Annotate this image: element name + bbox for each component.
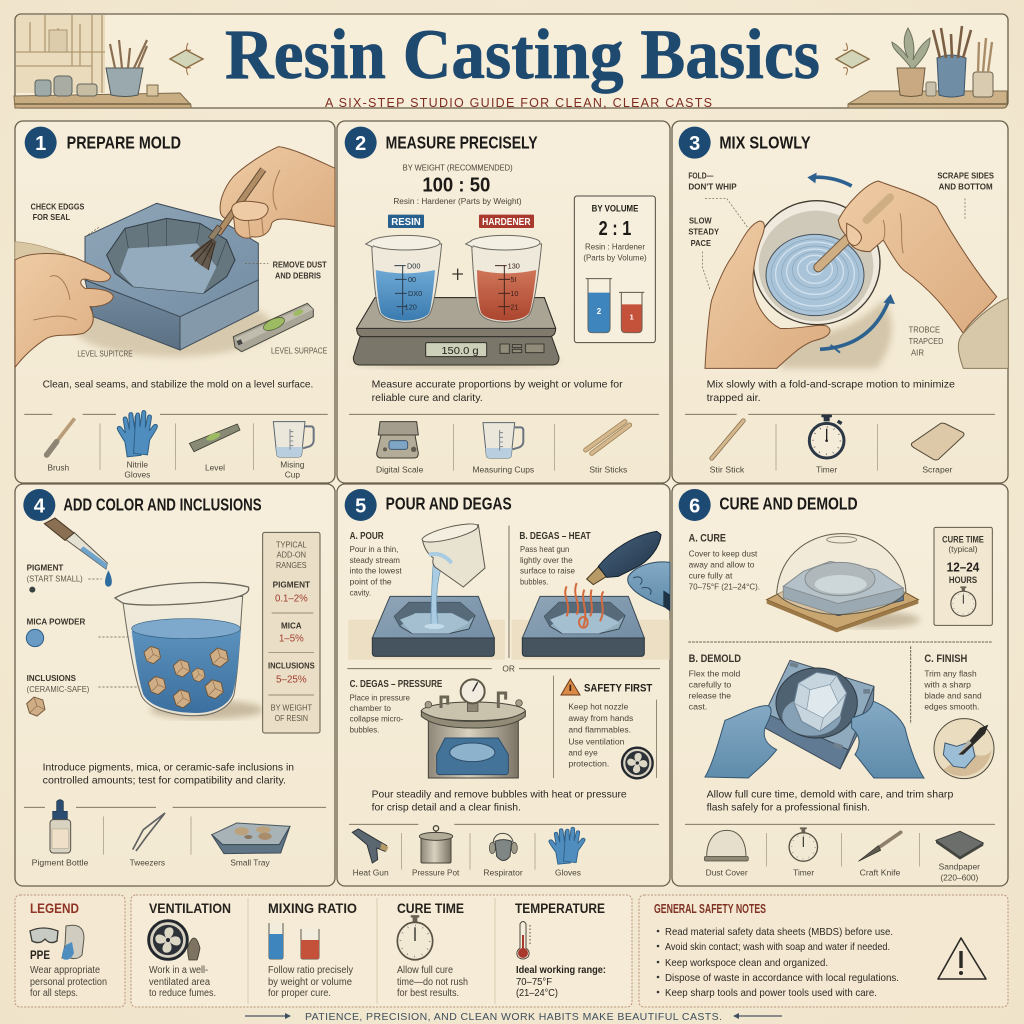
- box: cure time: (typical): [948, 544, 978, 554]
- illustration: pressure pot: [421, 679, 525, 778]
- reference: mixing ratio: by weight or volume: [268, 977, 352, 988]
- tool: craft knife: Craft Knife: [860, 867, 901, 877]
- tool: respirator: Respirator: [483, 867, 523, 877]
- safety text: and flammables.: [568, 724, 631, 734]
- section a: pour: cavity.: [350, 587, 371, 597]
- reference: temperature: Ideal working range:: [516, 965, 606, 976]
- icon: spirit level: [233, 303, 313, 352]
- reference: temperature: 70–75°F: [516, 977, 552, 988]
- callout: slow steady pace: SLOW: [689, 215, 712, 225]
- header banner: [14, 14, 1008, 110]
- tool: scraper: Scraper: [922, 464, 953, 474]
- tool: timer: [809, 415, 844, 474]
- notes heading: GENERAL SAFETY NOTES: [654, 901, 766, 916]
- illustration: hands brushing hexagonal mold: [15, 147, 335, 367]
- illustration: left studio shelf: [14, 15, 191, 108]
- tool: gloves: [548, 827, 586, 877]
- tool: mixing cup: Mising: [280, 459, 305, 469]
- panel: reference strip: [131, 895, 632, 1007]
- tag: resin: [388, 215, 424, 228]
- safety text: Keep hot nozzle: [568, 702, 629, 712]
- description: flash safely for a professional finish.: [707, 803, 870, 814]
- section b: degas heat: bubbles.: [520, 576, 548, 586]
- box: typical add-on ranges: 5–25%: [276, 675, 307, 686]
- section b: demold: B. DEMOLD: [689, 653, 741, 665]
- tool: dust cover: Dust Cover: [706, 867, 748, 877]
- box: by volume: 2 : 1: [599, 218, 631, 240]
- step badge 3: 3: [689, 133, 700, 155]
- section b: degas heat: surface to raise: [520, 566, 575, 576]
- tool: level: Level: [205, 463, 225, 473]
- step badge 5: [345, 489, 377, 521]
- section c: finish: Trim any flash: [924, 668, 977, 678]
- section a: pour: point of the: [350, 576, 392, 586]
- beaker: resin: [366, 235, 442, 322]
- icon: ventilation fan: [622, 748, 653, 778]
- scale display: 150.0 g: [441, 346, 479, 357]
- callout: trapped air: TRAPCED: [909, 336, 943, 346]
- description: Introduce pigments, mica, or ceramic-safe inclusions in: [43, 762, 294, 773]
- description: for crisp detail and a clear finish.: [372, 803, 521, 814]
- tool: mixing cup: [273, 422, 314, 480]
- section c: finish: C. FINISH: [924, 653, 967, 665]
- callout: check edges: FOR SEAL: [33, 212, 71, 222]
- reference: cure time: Allow full cure: [397, 965, 453, 976]
- callout: check edges: CHECK EDGGS: [31, 201, 85, 211]
- description: Pour steadily and remove bubbles with heat or pressure: [372, 789, 627, 800]
- section b: demold: release the: [689, 690, 731, 700]
- heading: measure precisely: MEASURE PRECISELY: [386, 132, 538, 152]
- heading: cure and demold: CURE AND DEMOLD: [719, 494, 858, 514]
- section c: degas pressure: Place in pressure: [350, 692, 410, 702]
- step badge 6: 6: [689, 495, 700, 517]
- tool: measuring cups: Measuring Cups: [472, 464, 534, 474]
- panel: general safety notes: [639, 895, 1008, 1007]
- beaker: hardener: [466, 235, 542, 322]
- description: [372, 380, 623, 404]
- callout: level surface right: LEVEL SURPACE: [271, 345, 328, 355]
- ratio by weight: BY WEIGHT (RECOMMENDED): [403, 163, 513, 173]
- label: mica powder: [26, 616, 86, 647]
- divider label: or: OR: [502, 664, 515, 674]
- box: typical add-on ranges: TYPICAL: [276, 539, 307, 549]
- tool: brush: Brush: [47, 463, 70, 473]
- beaker: resin: D00: [407, 261, 420, 270]
- tool: stir stick: Stir Stick: [710, 464, 745, 474]
- reference: cure time: [397, 901, 468, 999]
- ratio by weight: 100 : 50: [422, 175, 490, 197]
- box: typical add-on ranges: RANGES: [276, 560, 307, 570]
- panel: step 2 measure precisely: [337, 121, 670, 483]
- section a: pour: steady stream: [350, 555, 400, 565]
- label: pigment: PIGMENT: [27, 563, 64, 573]
- callout: remove dust: [273, 259, 327, 281]
- icon: goggles and ppe: [30, 925, 84, 960]
- panel: step 1 prepare mold: [15, 121, 335, 483]
- beaker: resin: 00: [408, 275, 416, 284]
- illustration: hands mixing in bowl: [702, 181, 1008, 368]
- section c: finish: blade and sand: [924, 690, 982, 700]
- label: inclusions: (CERAMIC-SAFE): [27, 684, 90, 694]
- safety text: away from hands: [568, 713, 633, 723]
- section b: demold: Flex the mold: [689, 668, 741, 678]
- section a: cure: away and allow to: [689, 559, 755, 569]
- notes list: [657, 926, 899, 999]
- description: controlled amounts; test for compatibility and clarity.: [43, 776, 286, 787]
- heading: pour and degas: POUR AND DEGAS: [386, 494, 512, 514]
- section b: demold: cast.: [689, 702, 707, 712]
- tool: mixing cup: Cup: [285, 470, 300, 480]
- box: by volume: BY VOLUME: [592, 204, 638, 214]
- notes list: Avoid skin contact; wash with soap and water if needed.: [665, 941, 890, 953]
- label: inclusions: [27, 673, 90, 716]
- tool: gloves: Gloves: [555, 867, 581, 877]
- scale display: [426, 343, 487, 357]
- icon: warning triangle: [561, 679, 580, 695]
- callout: slow steady pace: PACE: [691, 238, 711, 248]
- safety text: and eye: [568, 748, 598, 758]
- illustration: gloved hands demolding cast: [705, 660, 924, 778]
- section a: cure: 70–75°F (21–24°C).: [689, 582, 760, 592]
- description: [43, 762, 294, 787]
- reference: mixing ratio: [268, 901, 357, 999]
- reference: ventilation: [149, 901, 231, 999]
- reference: ventilation: Work in a well-: [149, 965, 208, 976]
- panel: step 3 mix slowly: [672, 121, 1008, 483]
- section a: pour: into the lowest: [350, 566, 402, 576]
- callout: scrape sides: AND BOTTOM: [939, 181, 993, 191]
- illustration: dropper: [44, 518, 112, 587]
- description: [707, 380, 955, 404]
- tool: stir sticks: [586, 422, 630, 474]
- section c: degas pressure: [350, 679, 443, 734]
- beaker: hardener: 5I: [510, 275, 516, 284]
- illustration: trimming flash inset: [934, 719, 994, 779]
- step badge 5: 5: [355, 495, 366, 517]
- ppe description: [30, 965, 107, 999]
- callout: fold do not whip: DON'T WHIP: [688, 181, 737, 191]
- tool: digital scale: [376, 422, 424, 474]
- reference: cure time: CURE TIME: [397, 901, 464, 916]
- reference: ventilation: VENTILATION: [149, 901, 231, 916]
- tool: heat gun: [352, 829, 389, 877]
- section a: cure: Cover to keep dust: [689, 548, 758, 558]
- safety text: protection.: [568, 758, 609, 768]
- section a: cure: [689, 533, 760, 592]
- beaker: resin: DX0: [408, 289, 422, 298]
- box: typical add-on ranges: ADD-ON: [277, 550, 306, 560]
- step badge 2: 2: [355, 133, 366, 155]
- arrow: top rotation: [807, 173, 852, 186]
- beaker: hardener: 21: [510, 302, 518, 311]
- beaker: resin: 120: [405, 302, 417, 311]
- heading: mix slowly: MIX SLOWLY: [719, 132, 811, 152]
- step badge 4: [23, 489, 55, 521]
- section b: demold: [689, 653, 741, 712]
- panel: step 5 pour and degas: [337, 484, 670, 886]
- description: [707, 789, 954, 814]
- tool: pressure pot: [412, 826, 460, 877]
- notes list: Read material safety data sheets (MBDS) before use.: [665, 926, 893, 938]
- tool: nitrile gloves: [116, 410, 159, 480]
- tool: nitrile gloves: Gloves: [124, 470, 150, 480]
- step badge 2: [345, 127, 377, 159]
- box: typical add-on ranges: 0.1–2%: [275, 594, 308, 605]
- section a: cure: A. CURE: [689, 533, 726, 545]
- safety first heading: SAFETY FIRST: [584, 682, 652, 694]
- safety text: Use ventilation: [568, 736, 625, 746]
- tool: pigment bottle: Pigment Bottle: [32, 858, 89, 868]
- heading: prepare mold: PREPARE MOLD: [67, 132, 181, 152]
- reference: temperature: (21–24°C): [516, 988, 558, 999]
- tool: small tray: [212, 823, 290, 868]
- section a: cure: cure fully at: [689, 570, 733, 580]
- illustration: digital scale: [353, 298, 560, 368]
- icon: warning triangle: [938, 938, 986, 979]
- reference: cure time: for best results.: [397, 988, 459, 999]
- section c: degas pressure: collapse micro-: [350, 714, 404, 724]
- tool: timer: [789, 827, 818, 877]
- section b: degas heat: [519, 531, 591, 586]
- footer tagline: PATIENCE, PRECISION, AND CLEAN WORK HABITS MAKE BEAUTIFUL CASTS.: [305, 1011, 722, 1023]
- beaker: hardener: 10: [510, 289, 518, 298]
- tool: heat gun: Heat Gun: [353, 867, 389, 877]
- callout: remove dust: AND DEBRIS: [275, 271, 321, 281]
- tool: level: [189, 424, 240, 473]
- illustration: beaker with blue resin and inclusions: [115, 583, 263, 719]
- subtitle: A SIX-STEP STUDIO GUIDE FOR CLEAN, CLEAR CASTS: [325, 96, 712, 110]
- tool: pigment bottle: [32, 800, 89, 868]
- box: by volume: Resin : Hardener: [585, 241, 645, 251]
- tool: digital scale: Digital Scale: [376, 464, 424, 474]
- ppe description: for all steps.: [30, 988, 78, 999]
- description: Allow full cure time, demold with care, and trim sharp: [707, 789, 954, 800]
- box: typical add-on ranges: [263, 532, 320, 733]
- reference: temperature: TEMPERATURE: [515, 901, 605, 916]
- illustration: pouring resin into mold: [348, 520, 505, 660]
- label: pigment: [27, 563, 83, 593]
- tool: scraper: [911, 423, 964, 474]
- box: typical add-on ranges: MICA: [281, 620, 302, 630]
- safety text: [568, 702, 633, 768]
- tool: timer: Timer: [793, 867, 814, 877]
- box: typical add-on ranges: 1–5%: [279, 634, 304, 645]
- description: Clean, seal seams, and stabilize the mold on a level surface.: [43, 380, 313, 391]
- box: typical add-on ranges: INCLUSIONS: [268, 661, 315, 671]
- step badge 3: [679, 127, 711, 159]
- tool: stir stick: [710, 421, 745, 474]
- callout: trapped air: TROBCE: [909, 324, 940, 334]
- panel: step 4 add color and inclusions: [15, 484, 335, 886]
- panel: legend: [15, 895, 125, 1007]
- tool: timer: Timer: [816, 464, 837, 474]
- box: typical add-on ranges: BY WEIGHT: [271, 702, 312, 712]
- arrow: bottom rotation: [820, 294, 895, 353]
- tool: sandpaper: [936, 831, 983, 882]
- ornament: right diamond: [836, 43, 869, 75]
- reference: mixing ratio: for proper cure.: [268, 988, 331, 999]
- callout: slow steady pace: [688, 215, 719, 248]
- box: cure time: HOURS: [949, 575, 977, 585]
- box: cure time: [934, 527, 992, 625]
- section a: pour: A. POUR: [350, 531, 384, 542]
- section c: degas pressure: chamber to: [350, 703, 391, 713]
- box: by volume: 2: [597, 307, 602, 316]
- reference: mixing ratio: MIXING RATIO: [268, 901, 357, 916]
- illustration: dust cover over mold: [767, 534, 920, 632]
- box: typical add-on ranges: OF RESIN: [275, 713, 308, 723]
- reference: mixing ratio: Follow ratio precisely: [268, 965, 353, 976]
- reference: cure time: time—do not rush: [397, 977, 468, 988]
- notes list: Keep sharp tools and power tools used with care.: [665, 987, 877, 999]
- section b: degas heat: B. DEGAS – HEAT: [519, 531, 591, 542]
- tool: nitrile gloves: Nitrile: [127, 459, 148, 469]
- description: trapped air.: [707, 393, 761, 404]
- label: pigment: (START SMALL): [27, 573, 83, 583]
- symbol: plus: [452, 269, 463, 280]
- panel: step 6 cure and demold: [672, 484, 1008, 886]
- callout: remove dust: REMOVE DUST: [273, 259, 327, 269]
- title: Resin Casting Basics: [225, 16, 820, 94]
- ppe description: Wear appropriate: [30, 965, 100, 976]
- tool: tweezers: Tweezers: [130, 858, 165, 868]
- callout: fold do not whip: [688, 170, 737, 191]
- description: reliable cure and clarity.: [372, 393, 483, 404]
- step badge 6: [679, 489, 711, 521]
- label: inclusions: INCLUSIONS: [27, 673, 76, 683]
- legend heading: LEGEND: [30, 901, 79, 916]
- box: by volume: 1: [630, 312, 634, 321]
- description: Measure accurate proportions by weight or volume for: [372, 380, 623, 391]
- tool: small tray: Small Tray: [230, 858, 270, 868]
- ratio by weight: [393, 163, 522, 206]
- illustration: right shelf with plant and brushes: [848, 26, 1007, 108]
- section c: degas pressure: bubbles.: [350, 724, 379, 734]
- box: by volume: (Parts by Volume): [583, 253, 647, 263]
- section a: pour: Pour in a thin,: [350, 544, 398, 554]
- description: [372, 789, 627, 814]
- tool: dust cover: [704, 830, 748, 877]
- box: typical add-on ranges: PIGMENT: [273, 580, 311, 590]
- label: mica powder: MICA POWDER: [27, 616, 86, 626]
- step badge 1: 1: [35, 133, 46, 155]
- callout: trapped air: AIR: [911, 347, 924, 357]
- ornament: left diamond: [170, 43, 203, 75]
- heading: add color and inclusions: ADD COLOR AND INCLUSIONS: [63, 494, 262, 514]
- section b: demold: carefully to: [689, 679, 732, 689]
- callout: slow steady pace: STEADY: [688, 227, 719, 237]
- section c: finish: edges smooth.: [924, 702, 979, 712]
- callout: scrape sides: [937, 170, 994, 191]
- tool: sandpaper: (220–600): [940, 872, 979, 882]
- reference: ventilation: ventilated area: [149, 977, 210, 988]
- section a: pour: [350, 531, 402, 597]
- ppe label: PPE: [30, 948, 50, 962]
- section c: finish: with a sharp: [923, 679, 971, 689]
- box: by volume: [574, 196, 655, 343]
- tag: resin: RESIN: [391, 217, 421, 228]
- tool: respirator: [483, 833, 523, 877]
- notes list: Dispose of waste in accordance with local regulations.: [665, 972, 899, 984]
- illustration: heat gun over mold: [512, 531, 670, 660]
- section c: degas pressure: C. DEGAS – PRESSURE: [350, 679, 443, 690]
- section b: degas heat: lightly over the: [520, 555, 573, 565]
- reference: ventilation: to reduce fumes.: [149, 988, 216, 999]
- callout: scrape sides: SCRAPE SIDES: [937, 170, 994, 180]
- notes list: Keep workspoce clean and organized.: [665, 957, 828, 969]
- box: cure time: CURE TIME: [942, 534, 984, 544]
- tag: hardener: HARDENER: [482, 217, 531, 228]
- step badge 1: [25, 127, 57, 159]
- tool: brush: [47, 418, 75, 473]
- tool: measuring cups: [472, 423, 534, 474]
- callout: trapped air: [909, 324, 943, 357]
- beaker: hardener: 130: [508, 261, 520, 270]
- section c: finish: [923, 653, 982, 712]
- section b: degas heat: Pass heat gun: [520, 544, 570, 554]
- ppe description: personal protection: [30, 977, 107, 988]
- tool: pressure pot: Pressure Pot: [412, 867, 460, 877]
- ratio by weight: Resin : Hardener (Parts by Weight): [393, 196, 522, 206]
- callout: check edges: [31, 201, 85, 222]
- box: cure time: 12–24: [947, 560, 979, 574]
- tool: stir sticks: Stir Sticks: [589, 464, 627, 474]
- reference: temperature: [515, 901, 606, 999]
- description: Mix slowly with a fold-and-scrape motion to minimize: [707, 380, 955, 391]
- step badge 4: 4: [34, 495, 45, 517]
- tool: craft knife: [858, 832, 901, 877]
- tool: sandpaper: Sandpaper: [939, 862, 980, 872]
- tool: tweezers: [130, 813, 165, 868]
- callout: level surface left: LEVEL SUPITCRE: [77, 349, 133, 359]
- callout: fold do not whip: FOLD—: [688, 170, 714, 180]
